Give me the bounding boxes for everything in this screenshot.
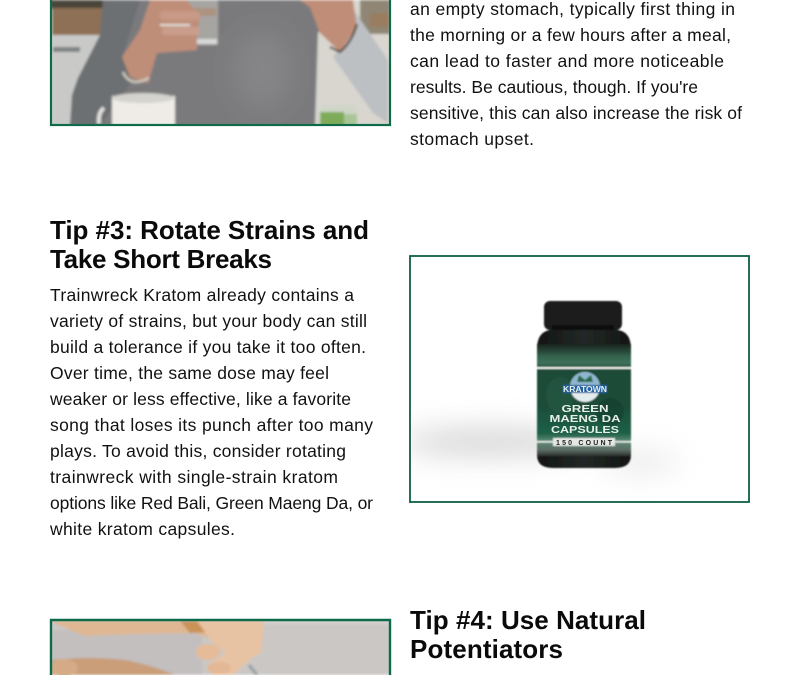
bottle label text: MAENG DA	[550, 414, 620, 425]
heading: tip 4	[410, 605, 646, 664]
text block: tip 3 body: Trainwreck Kratom already contains a	[50, 285, 354, 305]
text block: tip 2 continued: the morning or a few hours after a meal,	[410, 25, 731, 45]
photo: woman drinking a glass of water	[50, 0, 391, 126]
photo: Green Maeng Da capsules bottle	[400, 256, 749, 502]
bottle label text	[550, 385, 620, 447]
text block: tip 3 body: options like Red Bali, Green Maeng Da, or	[50, 493, 373, 513]
text block: tip 3 body	[49, 285, 373, 539]
photo: hands with dropper	[50, 619, 392, 675]
heading: tip 4: Potentiators	[410, 634, 563, 664]
bottle label text: KRATOWN	[563, 385, 607, 394]
text block: tip 2 continued: results. Be cautious, though. If you're	[410, 77, 698, 97]
bottle label text: 150 COUNT	[556, 440, 613, 447]
text block: tip 3 body: variety of strains, but your body can still	[50, 311, 367, 331]
text block: tip 2 continued	[410, 0, 742, 149]
text block: tip 3 body: trainwreck with single-strain kratom	[50, 467, 338, 487]
bottle shadow	[400, 430, 680, 469]
bottle label text: CAPSULES	[551, 425, 619, 436]
heading: tip 3: Tip #3: Rotate Strains and	[50, 215, 369, 245]
text block: tip 3 body: weaker or less effective, like a favorite	[49, 389, 351, 409]
text block: tip 3 body: song that loses its punch after too many	[50, 415, 373, 435]
heading: tip 4: Tip #4: Use Natural	[410, 605, 646, 635]
text block: tip 3 body: plays. To avoid this, consider rotating	[50, 441, 346, 461]
heading: tip 3: Take Short Breaks	[50, 244, 272, 274]
text block: tip 3 body: build a tolerance if you take it too often.	[50, 337, 366, 357]
text block: tip 2 continued: can lead to faster and more noticeable	[410, 51, 724, 71]
bottle label text: GREEN	[562, 404, 608, 415]
heading: tip 3	[50, 215, 369, 274]
text block: tip 3 body: Over time, the same dose may feel	[50, 363, 329, 383]
bottle	[537, 301, 631, 468]
text block: tip 2 continued: sensitive, this can also increase the risk of	[410, 103, 742, 123]
text block: tip 2 continued: stomach upset.	[410, 129, 534, 149]
text block: tip 3 body: white kratom capsules.	[49, 519, 235, 539]
